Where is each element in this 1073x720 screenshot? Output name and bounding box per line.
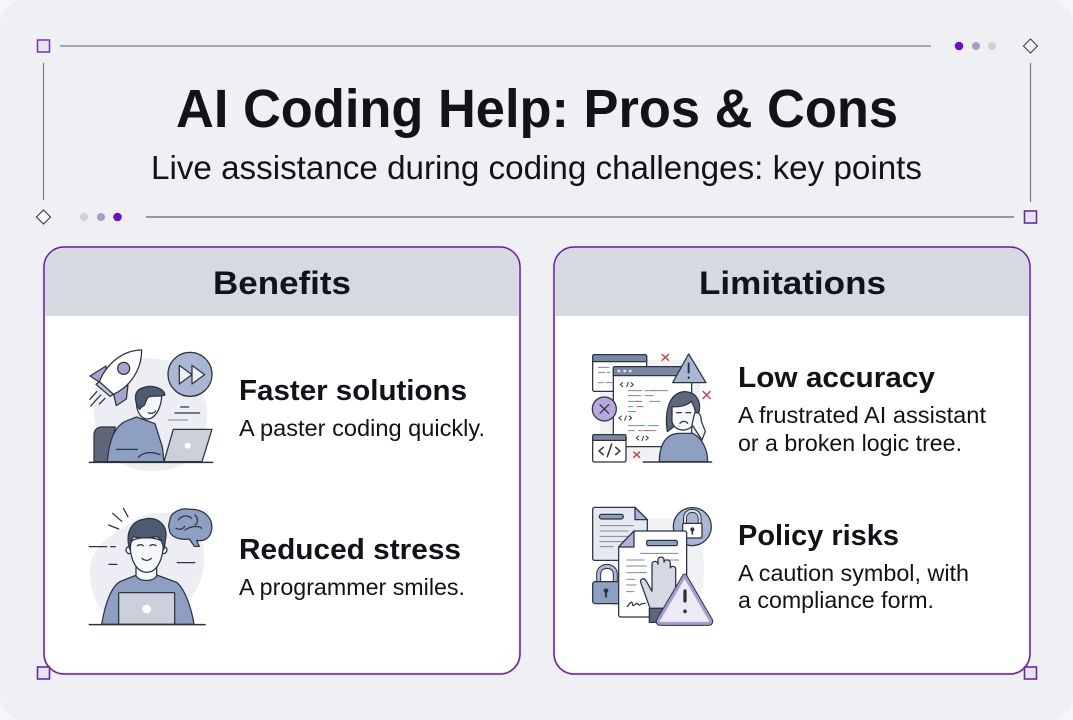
text: reduced stress: Reduced stress xyxy=(239,534,461,566)
icon: compliance form with warning xyxy=(593,507,711,623)
panel: benefits xyxy=(44,247,520,674)
icon: smiling programmer with brain xyxy=(89,508,212,625)
text: low accuracy xyxy=(738,362,987,456)
subtitle: Live assistance during coding challenges: key points xyxy=(151,149,922,186)
header frame xyxy=(36,39,1038,224)
text: low accuracy: or a broken logic tree. xyxy=(738,430,962,456)
icon: frustrated assistant with code windows xyxy=(592,354,712,462)
text: reduced stress: A programmer smiles. xyxy=(239,574,465,600)
text: low accuracy: A frustrated AI assistant xyxy=(738,402,987,428)
heading: benefits: Benefits xyxy=(213,265,351,301)
text: faster solutions: Faster solutions xyxy=(239,375,467,407)
text: policy risks: A caution symbol, with xyxy=(738,560,969,586)
icon: developer with rocket xyxy=(89,350,213,471)
panel: limitations xyxy=(554,247,1030,674)
text: policy risks xyxy=(738,520,969,613)
text: policy risks: a compliance form. xyxy=(738,587,934,613)
panel corner markers xyxy=(38,667,1036,679)
heading: limitations: Limitations xyxy=(699,265,886,301)
text: policy risks: Policy risks xyxy=(738,520,899,552)
text: low accuracy: Low accuracy xyxy=(738,362,935,394)
text: faster solutions: A paster coding quickly. xyxy=(239,415,485,441)
text: reduced stress xyxy=(239,534,465,600)
text: faster solutions xyxy=(239,375,485,441)
title: AI Coding Help: Pros & Cons xyxy=(176,79,898,139)
